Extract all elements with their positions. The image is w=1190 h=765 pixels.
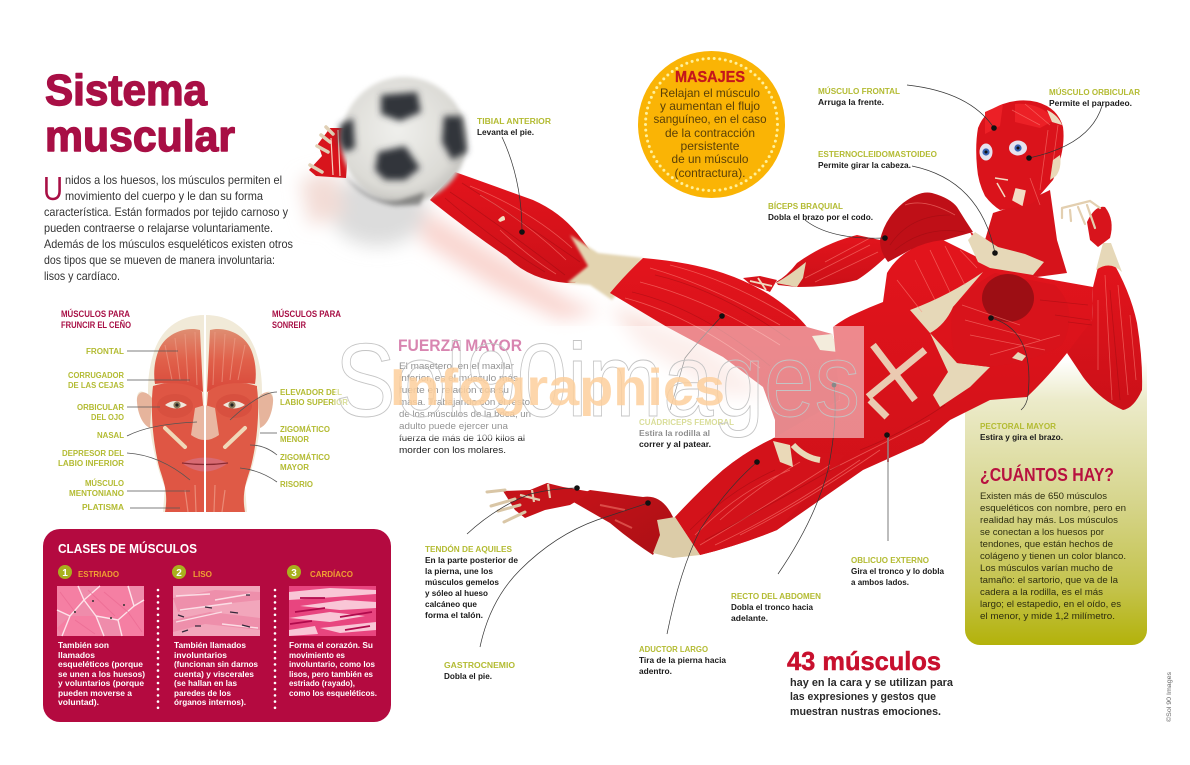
class 1: estriado: 1	[62, 568, 68, 579]
muscle: pectoral major	[951, 273, 1070, 367]
text block: fuerza mayor: fuerte en relación con su	[399, 385, 509, 395]
callout: bíceps braquial	[768, 201, 888, 241]
callout: tendón de aquiles: músculos gemelos	[425, 577, 499, 587]
class 3: cardíaco: Forma el corazón. Su	[289, 640, 373, 650]
illustration: face muscles	[137, 315, 273, 512]
muscle: upper pectoral fibers	[897, 246, 977, 312]
callout: gastrocnemio: GASTROCNEMIO	[444, 660, 515, 670]
intro text: lisos y cardíaco.	[44, 269, 120, 283]
callout: tendón de aquiles: forma el talón.	[425, 610, 483, 620]
labels: left side: FRONTAL	[86, 346, 124, 356]
class 1: estriado: se unen a los huesos)	[58, 669, 145, 679]
callout: gastrocnemio: Dobla el pie.	[444, 671, 492, 681]
labels: left side: LABIO INFERIOR	[58, 458, 125, 468]
class 3: cardíaco: CARDÍACO	[310, 569, 354, 579]
class 2: liso	[172, 565, 260, 707]
abdominal tendons	[868, 345, 925, 417]
callout: tendón de aquiles: calcáneo que	[425, 599, 477, 609]
masajes badge	[638, 51, 785, 198]
callout: tibial anterior: Levanta el pie.	[477, 127, 534, 137]
text block: cuántos hay: colágeno y tienen un color blanco.	[980, 551, 1126, 561]
kicking foot	[309, 127, 350, 178]
badge text: persistente	[680, 140, 740, 153]
labels: left side: CORRUGADOR	[68, 370, 125, 380]
labels: right side: MAYOR	[280, 462, 310, 472]
badge text: y aumentan el flujo	[660, 100, 760, 113]
head	[976, 100, 1064, 210]
class 1: estriado: esqueléticos (porque	[58, 659, 143, 669]
text block: cuántos hay: largo; el estapedio, en el oído, es	[980, 599, 1122, 609]
text block: cuántos hay: Los músculos varían mucho de	[980, 563, 1113, 573]
title	[45, 66, 235, 161]
labels: right side: RISORIO	[280, 479, 313, 489]
callout: aductor largo	[639, 459, 760, 676]
callout: recto del abdomen: adelante.	[731, 613, 768, 623]
class 3: cardíaco: 3	[291, 568, 297, 579]
panel: clases de músculos	[43, 529, 391, 722]
labels: right side: ELEVADOR DEL	[280, 387, 342, 397]
callout: esternocleidomastoideo	[818, 149, 998, 256]
callout: aductor largo: adentro.	[639, 666, 672, 676]
callout: músculo orbicular: Permite el parpadeo.	[1049, 98, 1132, 108]
text block: fuerza mayor: El masetero, en el maxilar	[399, 361, 514, 371]
intro text: movimiento del cuerpo y le dan su forma	[65, 189, 263, 203]
labels: left side: ORBICULAR	[77, 402, 125, 412]
intro text: nidos a los huesos, los músculos permiten el	[65, 173, 282, 187]
callout: aductor largo: ADUCTOR LARGO	[639, 644, 708, 654]
labels: left side: DEL OJO	[91, 412, 124, 422]
callout: tendón de aquiles	[425, 485, 580, 620]
text block: 43 músculos: hay en la cara y se utilizan para	[790, 677, 954, 689]
text block: cuántos hay: realidad hay más. Los músculos	[980, 515, 1119, 525]
labels: left side: PLATISMA	[82, 502, 124, 512]
watermark: Infographics	[390, 359, 725, 417]
callout: cuádriceps femoral: Estira la rodilla al	[639, 428, 710, 438]
badge text: (contractura).	[674, 167, 746, 180]
callout: tendón de aquiles: TENDÓN DE AQUILES	[425, 543, 512, 554]
callout: tendón de aquiles: la pierna, une los	[425, 566, 493, 576]
text block: cuántos hay	[980, 464, 1126, 621]
tendon: knee	[567, 235, 643, 300]
callout: recto del abdomen	[731, 383, 836, 623]
callout: esternocleidomastoideo: Permite girar la cabeza.	[818, 160, 911, 170]
class 3: cardíaco: involuntario, como los	[289, 659, 375, 669]
foot	[503, 483, 592, 518]
text block: 43 músculos: las expresiones y gestos que	[790, 691, 936, 703]
soccer ball	[339, 77, 467, 206]
callout: tibial anterior	[477, 116, 552, 235]
labels: right side	[280, 387, 349, 489]
callout: músculo orbicular: MÚSCULO ORBICULAR	[1049, 86, 1141, 97]
class 3: cardíaco: como los esqueléticos.	[289, 688, 377, 698]
neck	[970, 190, 1067, 277]
collar tendon	[968, 232, 1044, 275]
badge text: sanguíneo, en el caso	[654, 113, 766, 126]
badge text: Relajan el músculo	[660, 87, 760, 100]
heading: frown muscles: FRUNCIR EL CEÑO	[61, 320, 131, 330]
class 2: liso: (se hallan en las	[174, 678, 237, 688]
labels: right side: LABIO SUPERIOR	[280, 397, 349, 407]
labels: right side: MENOR	[280, 434, 310, 444]
torso and lower thigh	[675, 240, 1093, 555]
muscle: biceps forearm	[743, 235, 888, 292]
heading: frown muscles	[61, 308, 131, 330]
callout: oblicuo externo: Gira el tronco y lo dobla	[851, 566, 944, 576]
intro text: Además de los músculos esqueléticos existen otros	[44, 237, 293, 251]
class 1: estriado: voluntad).	[58, 697, 99, 707]
hand	[1087, 207, 1112, 247]
class 1: estriado: pueden moverse a	[58, 688, 132, 698]
text block: cuántos hay: se conectan a los huesos por	[980, 527, 1104, 537]
intro text	[43, 170, 293, 283]
callout: oblicuo externo	[851, 432, 944, 587]
badge text: de la contracción	[665, 127, 755, 140]
heading: smile muscles	[272, 308, 341, 330]
badge text: de un músculo	[672, 153, 748, 166]
panel heading: CLASES DE MÚSCULOS	[58, 541, 197, 556]
class 1: estriado	[57, 565, 145, 707]
face muscle diagram	[58, 308, 349, 512]
class 1: estriado: También son	[58, 640, 109, 650]
callout: recto del abdomen: Dobla el tronco hacia	[731, 602, 813, 612]
class 2: liso: paredes de los	[174, 688, 231, 698]
text block: fuerza mayor: inferior, es el músculo más	[399, 373, 519, 383]
class 3: cardíaco: movimiento es	[289, 650, 345, 660]
class 1: estriado: ESTRIADO	[78, 570, 120, 579]
watermark: Sol90images	[335, 323, 860, 439]
text block: 43 músculos: muestran nustras emociones.	[790, 706, 941, 718]
text block: fuerza mayor	[398, 336, 531, 455]
class 2: liso: cuenta) y viscerales	[174, 669, 254, 679]
callout: cuádriceps femoral: correr y al patear.	[639, 439, 711, 449]
text block: fuerza mayor: FUERZA MAYOR	[398, 336, 522, 355]
labels: left side: NASAL	[97, 430, 124, 440]
class 2: liso: (funcionan sin darnos	[174, 659, 258, 669]
text block: cuántos hay: el menor, y mide 1,2 milímetro.	[980, 611, 1115, 621]
callout: músculo frontal: MÚSCULO FRONTAL	[818, 85, 900, 96]
callout: músculo orbicular	[1026, 86, 1141, 161]
credit: ©Sol 90 Images	[1165, 671, 1173, 722]
callout: esternocleidomastoideo: ESTERNOCLEIDOMASTOIDEO	[818, 149, 937, 159]
text block: fuerza mayor: masa. Trabajando con el resto	[399, 397, 530, 407]
title: Sistema	[45, 66, 208, 115]
text block: cuántos hay: cadera a la rodilla, es el más	[980, 587, 1104, 597]
intro text: característica. Están formados por tejido carnoso y	[44, 205, 288, 219]
class 3: cardíaco: estriado (rayado),	[289, 678, 355, 688]
muscle: quadriceps	[610, 258, 840, 440]
labels: left side: MÚSCULO	[85, 477, 124, 488]
labels: left side: MENTONIANO	[69, 488, 124, 498]
labels: right side: ZIGOMÁTICO	[280, 424, 330, 434]
human figure: muscular system	[309, 77, 1142, 558]
callout: tendón de aquiles: y sóleo al hueso	[425, 588, 488, 598]
intro text: pueden contraerse o relajarse voluntariamente.	[44, 221, 273, 235]
heading: smile muscles: SONREIR	[272, 320, 306, 330]
text block: fuerza mayor: adulto puede ejercer una	[399, 421, 508, 431]
muscle: tibial anterior	[430, 172, 595, 283]
class 1: estriado: y voluntarios (porque	[58, 678, 144, 688]
text block: 43 músculos	[787, 646, 954, 718]
text block: cuántos hay: Existen más de 650 músculos	[980, 491, 1108, 501]
callout: bíceps braquial: BÍCEPS BRAQUIAL	[768, 201, 843, 211]
title: muscular	[45, 112, 235, 161]
class 2: liso: 2	[176, 568, 182, 579]
text block: cuántos hay: ¿CUÁNTOS HAY?	[980, 464, 1114, 485]
class 3: cardíaco	[287, 565, 377, 698]
panel: cuántos hay background	[965, 360, 1147, 645]
callout: oblicuo externo: OBLICUO EXTERNO	[851, 555, 929, 565]
text block: 43 músculos: 43 músculos	[787, 646, 941, 676]
callout: recto del abdomen: RECTO DEL ABDOMEN	[731, 591, 821, 601]
text block: cuántos hay: tamaño: el sartorio, que va de la	[980, 575, 1118, 585]
badge text	[654, 87, 766, 180]
tendon: chest band	[910, 272, 990, 407]
text block: fuerza mayor: fuerza de más de 100 kilos al	[399, 433, 525, 443]
callout: gastrocnemio	[444, 500, 651, 681]
callout: músculo frontal: Arruga la frente.	[818, 97, 884, 107]
class 2: liso: órganos internos).	[174, 697, 246, 707]
ball motion blur	[300, 170, 770, 395]
class 2: liso: LISO	[193, 570, 213, 579]
label leader lines	[127, 351, 277, 508]
class 3: cardíaco: lisos, pero también es	[289, 669, 373, 679]
text block: fuerza mayor: morder con los molares.	[399, 445, 506, 455]
labels: left side	[58, 346, 125, 512]
callout: músculo frontal	[818, 85, 997, 131]
callout: pectoral mayor: PECTORAL MAYOR	[980, 421, 1057, 431]
callout: bíceps braquial: Dobla el brazo por el codo.	[768, 212, 873, 222]
badge heading: MASAJES	[675, 69, 745, 86]
labels: right side: ZIGOMÁTICO	[280, 452, 330, 462]
class 2: liso: involuntarios	[174, 650, 227, 660]
muscle: forearm and hand	[1062, 201, 1142, 410]
icon: eyes	[980, 144, 992, 160]
class 2: liso: También llamados	[174, 640, 246, 650]
callout: pectoral mayor: Estira y gira el brazo.	[980, 432, 1063, 442]
intro text: dos tipos que se mueven de manera involuntaria:	[44, 253, 275, 267]
callout: tendón de aquiles: En la parte posterior de	[425, 555, 518, 565]
callout: cuádriceps femoral: CUÁDRICEPS FEMORAL	[639, 417, 734, 427]
muscle: deltoid	[880, 192, 973, 262]
text block: cuántos hay: esqueléticos con nombre, pero en	[980, 503, 1126, 513]
text block: cuántos hay: tendones, que están hechos de	[980, 539, 1113, 549]
labels: left side: DEPRESOR DEL	[62, 448, 124, 458]
labels: left side: DE LAS CEJAS	[68, 380, 124, 390]
class 1: estriado: llamados	[58, 650, 95, 660]
callout: pectoral mayor	[980, 315, 1063, 442]
heading: smile muscles: MÚSCULOS PARA	[272, 308, 341, 319]
heading: frown muscles: MÚSCULOS PARA	[61, 308, 130, 319]
callout: tibial anterior: TIBIAL ANTERIOR	[477, 116, 552, 126]
drop capital: U	[43, 170, 63, 207]
callout: cuádriceps femoral	[639, 313, 734, 449]
muscle: lower leg	[487, 483, 700, 558]
text block: fuerza mayor: de los músculos de la boca, un	[399, 409, 531, 419]
callout: oblicuo externo: a ambos lados.	[851, 577, 909, 587]
callout: aductor largo: Tira de la pierna hacia	[639, 655, 726, 665]
